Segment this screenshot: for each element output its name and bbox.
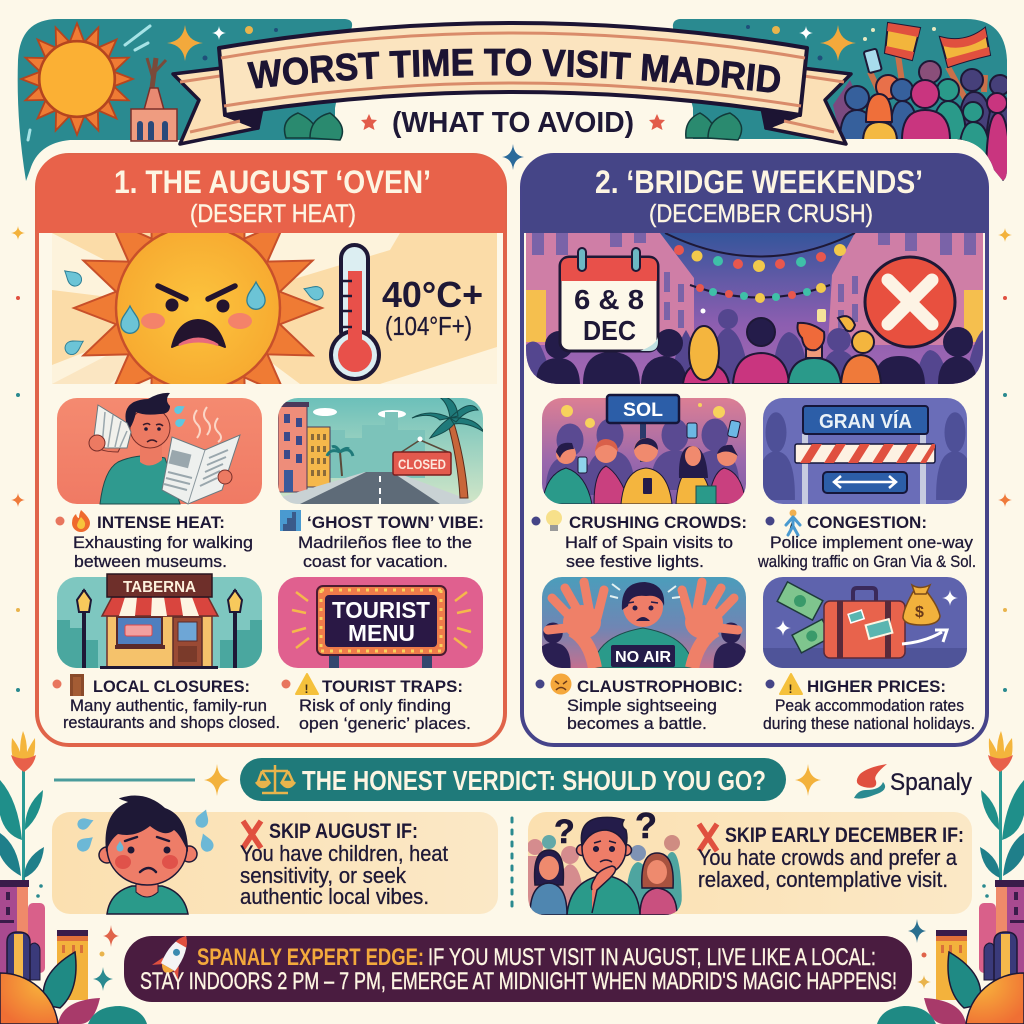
panel heading: 1. THE AUGUST ‘OVEN’ <box>114 164 431 200</box>
label: ghost town vibe <box>280 510 484 571</box>
scene: ghost town street with closed sign <box>278 396 484 504</box>
subtitle: (WHAT TO AVOID) <box>392 107 634 139</box>
label: ghost town vibe: coast for vacation. <box>303 552 448 571</box>
scene: Gran Via barrier <box>757 398 974 504</box>
tip text: SPANALY EXPERT EDGE: <box>197 944 424 971</box>
skip August text: sensitivity, or seek <box>240 863 407 888</box>
scene: ghost town street with closed sign: CLOSED <box>398 456 446 472</box>
skip December text <box>698 824 964 892</box>
calendar: 6 & 8 Dec: DEC <box>583 315 636 346</box>
woman right <box>640 853 677 915</box>
label: intense heat: Exhausting for walking <box>73 533 253 552</box>
scene: suitcase and money <box>763 577 967 668</box>
calendar: 6 & 8 Dec: 6 & 8 <box>574 284 644 315</box>
label: higher prices: ! <box>788 682 792 696</box>
label: congestion: Police implement one-way <box>770 533 974 552</box>
label: tourist traps: ! <box>304 682 308 696</box>
background crowd <box>526 309 983 384</box>
Spanaly logo: Spanaly <box>890 769 972 796</box>
header illustration: right teal band with crowd and flags <box>673 19 1012 181</box>
dotted divider <box>510 818 514 912</box>
puzzled man <box>567 817 640 915</box>
label: crushing crowds: CRUSHING CROWDS: <box>569 513 747 532</box>
verdict card: skip early December <box>526 805 972 915</box>
ribbon tails <box>173 68 851 144</box>
header illustration: left teal band with sun and tower <box>18 19 352 181</box>
panel heading <box>522 155 987 233</box>
icon: balance scales <box>256 765 295 793</box>
margin sparkles and dots <box>11 226 1012 991</box>
label: claustrophobic: becomes a battle. <box>567 714 707 733</box>
icon: rocket <box>152 928 199 980</box>
label: claustrophobic <box>536 674 743 733</box>
man in magenta <box>733 318 789 384</box>
label: ghost town vibe: Madrileños flee to the <box>298 533 472 552</box>
tip text: IF YOU MUST VISIT IN AUGUST, LIVE LIKE A LOCAL: <box>428 944 876 971</box>
label: tourist traps: TOURIST TRAPS: <box>322 677 463 696</box>
scene: tourist menu sign <box>278 577 483 668</box>
label: higher prices: Peak accommodation rates <box>775 696 964 715</box>
label: higher prices: during these national holidays. <box>763 714 975 733</box>
yellow haired woman <box>683 326 729 384</box>
label: crushing crowds <box>532 510 747 571</box>
panel heading <box>37 155 505 233</box>
crowd in header <box>833 55 1012 181</box>
label: intense heat <box>56 510 253 571</box>
panel: Bridge Weekends <box>522 155 987 745</box>
tip text <box>140 944 897 995</box>
thermometer <box>331 245 379 379</box>
label: local closures: LOCAL CLOSURES: <box>93 677 250 696</box>
panel heading: 2. ‘BRIDGE WEEKENDS’ <box>595 164 923 200</box>
label: tourist traps: Risk of only finding <box>299 696 451 715</box>
scene: tourist menu sign: TOURIST <box>332 597 430 623</box>
panel: The August Oven <box>37 155 505 745</box>
scene: suitcase and money: $ <box>915 604 924 621</box>
skip August text: You have children, heat <box>240 841 448 866</box>
question marks: ? <box>554 813 575 851</box>
title text: WORST TIME TO VISIT MADRID <box>247 48 780 92</box>
label: tourist traps: open ‘generic’ places. <box>299 714 471 733</box>
hero: December crowd street scene <box>526 233 983 384</box>
person with orange hair in teal <box>788 323 841 384</box>
bottom left plants and buildings <box>0 731 147 1024</box>
label: congestion: CONGESTION: <box>807 513 927 532</box>
skip December text: You hate crowds and prefer a <box>698 845 958 870</box>
label: ghost town vibe: ‘GHOST TOWN’ VIBE: <box>307 513 484 532</box>
scene: claustrophobic man, no air <box>535 577 749 668</box>
skip August text: authentic local vibes. <box>240 884 429 909</box>
question marks: ? <box>635 805 657 846</box>
label: crushing crowds: see festive lights. <box>566 552 704 571</box>
bottom right plants and buildings <box>877 731 1024 1024</box>
foreground dark crowd <box>536 327 977 384</box>
skip August text <box>240 820 448 909</box>
verdict heading <box>54 758 821 801</box>
label: intense heat: between museums. <box>74 552 227 571</box>
scene: Sol crowd: SOL <box>623 400 663 421</box>
verdict card: skip August <box>52 796 498 914</box>
temperature reading <box>382 274 483 341</box>
scene: claustrophobic man, no air: NO AIR <box>615 649 671 666</box>
question marks <box>554 805 657 851</box>
icon: puzzled man in crowd <box>526 817 682 915</box>
temperature reading: 40°C+ <box>382 274 483 315</box>
expert tip banner <box>124 928 912 1002</box>
label: higher prices: HIGHER PRICES: <box>807 677 946 696</box>
label: claustrophobic: CLAUSTROPHOBIC: <box>577 677 743 696</box>
scene: tourist menu sign: MENU <box>348 620 415 646</box>
icon: overheated boy <box>74 796 215 914</box>
skip December text: relaxed, contemplative visit. <box>698 867 948 892</box>
panel heading: (DESERT HEAT) <box>190 200 356 228</box>
scene: man with fan and newspaper <box>57 393 262 504</box>
verdict heading: THE HONEST VERDICT: SHOULD YOU GO? <box>302 765 766 796</box>
label: local closures: restaurants and shops closed. <box>63 713 280 732</box>
scene: closed taberna shop: TABERNA <box>123 579 196 596</box>
label: local closures: Many authentic, family-run <box>70 696 267 715</box>
scene: closed taberna shop <box>57 574 262 669</box>
icon: red X <box>699 824 717 851</box>
hero: angry sun and thermometer <box>52 233 497 384</box>
ribbon main band <box>219 23 807 115</box>
woman with ponytail in orange <box>838 316 881 384</box>
label: crushing crowds: Half of Spain visits to <box>565 533 733 552</box>
title ribbon <box>171 21 853 146</box>
panel heading: (DECEMBER CRUSH) <box>649 200 873 228</box>
label: intense heat: INTENSE HEAT: <box>97 513 225 532</box>
Spanaly logo <box>854 764 972 799</box>
woman left <box>530 850 567 915</box>
flags <box>885 23 920 60</box>
calendar: 6 & 8 Dec <box>560 248 658 351</box>
sparkle between panels <box>502 144 524 170</box>
label: higher prices <box>763 674 975 733</box>
phone <box>864 49 882 73</box>
icon: red X <box>243 821 261 848</box>
label: congestion <box>757 510 976 571</box>
label: claustrophobic: Simple sightseeing <box>567 696 717 715</box>
skip December text: SKIP EARLY DECEMBER IF: <box>725 824 964 847</box>
label: local closures <box>52 674 280 732</box>
temperature reading: (104°F+) <box>385 311 472 341</box>
label: congestion: walking traffic on Gran Via & Sol. <box>757 552 976 571</box>
label: tourist traps <box>282 674 471 733</box>
scene: Sol crowd <box>542 395 746 504</box>
scene: Gran Via barrier: GRAN VÍA <box>819 410 912 433</box>
skip August text: SKIP AUGUST IF: <box>269 820 418 843</box>
icon: red cross <box>865 257 955 347</box>
